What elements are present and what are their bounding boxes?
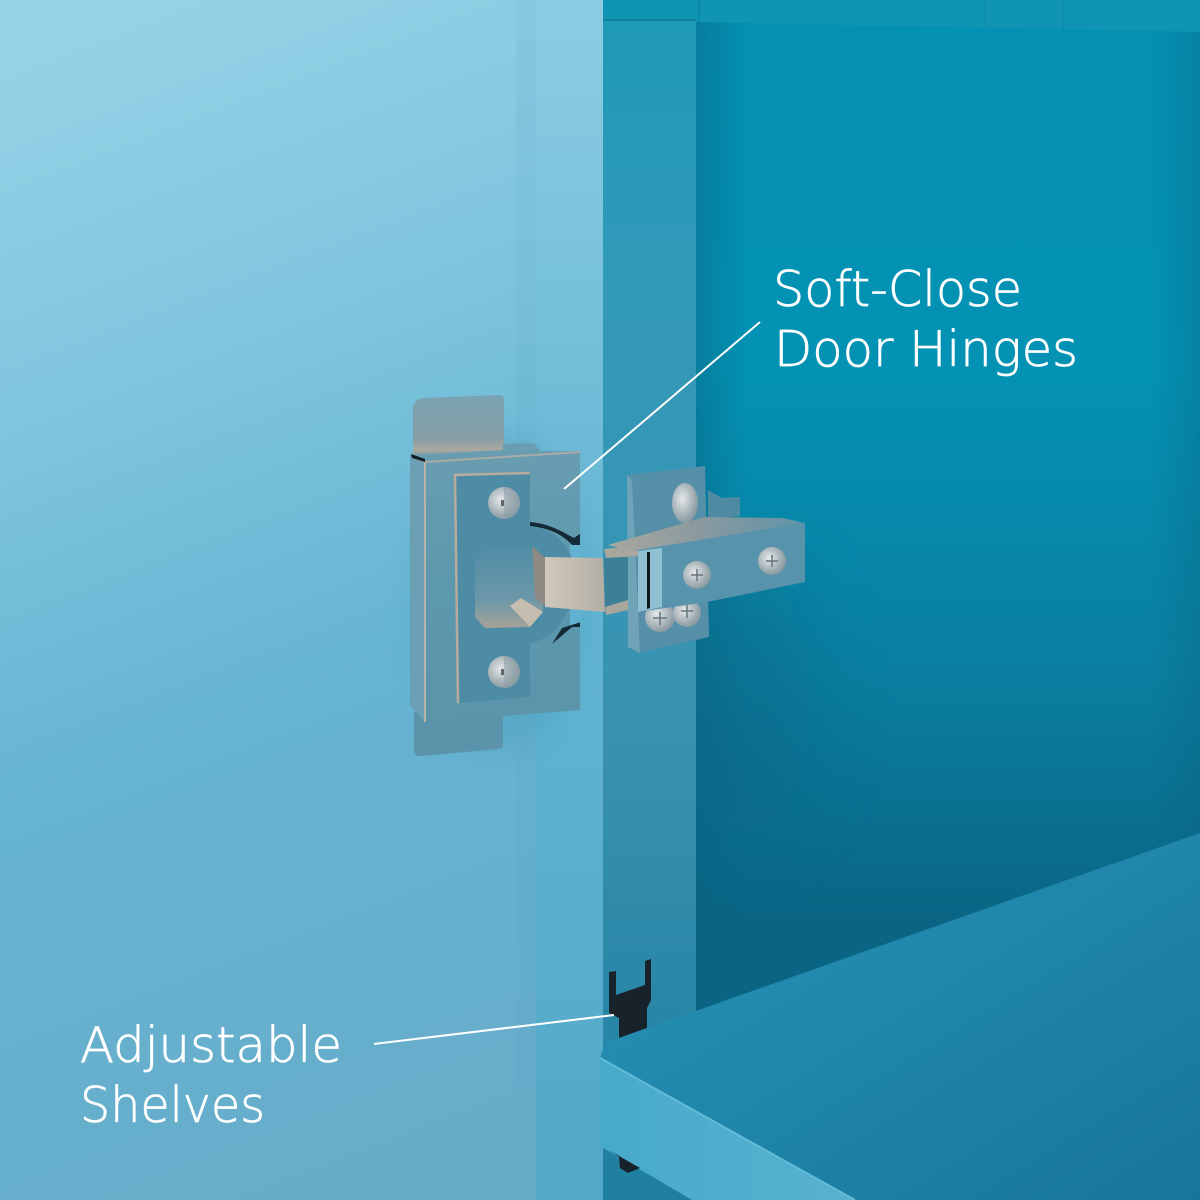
silver hinge block [545, 557, 605, 612]
callout: adjustable shelves: Shelves [80, 1077, 265, 1134]
callout: soft-close door hinges: Soft-Close [773, 261, 1022, 318]
panel: cabinet side frame [603, 0, 696, 1200]
back mounting tab top [413, 395, 504, 456]
panel: top rail [603, 0, 1200, 32]
hinge cup plate [410, 395, 605, 756]
back mounting tab bottom [414, 708, 503, 756]
plate screw lower left [645, 602, 675, 632]
arrow: soft-close hinge leader line [564, 322, 760, 489]
panel: door edge strip [536, 0, 604, 1200]
mounting plate [627, 466, 709, 653]
dark gaps around cup [530, 522, 581, 644]
arm front [638, 523, 805, 612]
slot strip [638, 548, 662, 612]
open notch at plate edge [570, 538, 581, 626]
top screw [488, 487, 520, 519]
panel: shelf front edge [600, 1058, 855, 1200]
callout: adjustable shelves: Adjustable [80, 1017, 342, 1074]
panel: shelf top [600, 833, 1200, 1200]
bottom screw [488, 656, 520, 688]
panel: cabinet interior back wall [670, 20, 1200, 1020]
octagon window [475, 546, 545, 628]
plate screw lower right [673, 599, 701, 627]
arrow: adjustable shelves leader line [374, 1015, 614, 1044]
hinge arm and mounting plate [604, 466, 805, 653]
icon: adjustable shelf clip [609, 959, 651, 1038]
icon: lower shelf clip [610, 1150, 640, 1173]
cup circle and inner plate [455, 473, 575, 703]
callout: adjustable shelves [80, 1017, 342, 1134]
arm top face [608, 517, 805, 552]
arm screw left [683, 561, 711, 589]
arm screw right [758, 547, 786, 575]
plate screw upper [672, 483, 698, 523]
callout: soft-close door hinges: Door Hinges [774, 321, 1078, 378]
hinge shadow [415, 430, 585, 750]
panel: cabinet door [0, 0, 536, 1200]
black slot [647, 552, 650, 609]
main plate [410, 443, 580, 722]
callout: soft-close door hinges [773, 261, 1078, 378]
connector [604, 555, 628, 614]
